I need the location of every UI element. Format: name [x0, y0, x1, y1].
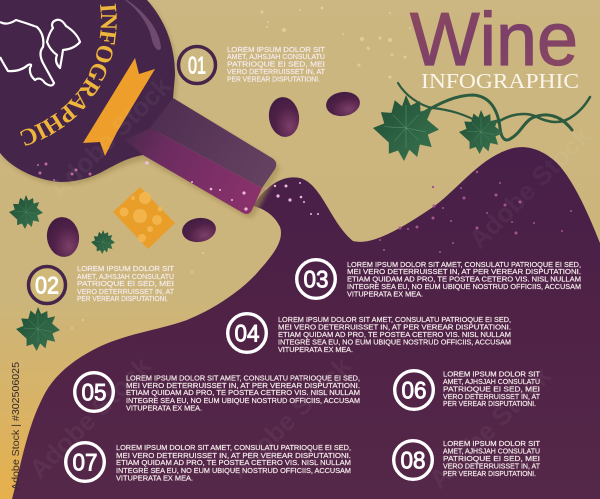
number badge 06	[395, 371, 433, 409]
leaf	[91, 230, 115, 254]
text block 08	[443, 439, 541, 478]
ribbon	[83, 58, 155, 156]
cheese	[113, 187, 175, 249]
text block 03: MEI VERO DETERRUISSET IN, AT PER VEREAR DISPUTATIONI.	[347, 267, 581, 276]
text block 01: PATRIOQUE EI SED, MEI	[227, 60, 325, 68]
text block 05	[126, 374, 360, 412]
stock watermarks: Adobe Stock	[223, 350, 357, 484]
text block 07: LOREM IPSUM DOLOR SIT AMET, CONSULATU PATRIOQUE EI SED,	[116, 443, 351, 452]
item 04	[228, 314, 511, 354]
grape	[324, 90, 362, 118]
text block 06: PER VEREAR DISPUTATIONI.	[443, 399, 536, 408]
bottle neck upper	[150, 98, 276, 188]
text block 05: LOREM IPSUM DOLOR SIT AMET, CONSULATU PATRIOQUE EI SED,	[126, 374, 360, 382]
bottle highlight	[125, 0, 161, 50]
text block 02: PATRIOQUE EI SED, MEI	[77, 279, 174, 288]
text block 04: LOREM IPSUM DOLOR SIT AMET, CONSULATU PATRIOQUE EI SED,	[278, 315, 511, 324]
text block 01: VERO DETERRUISSET IN, AT	[227, 67, 326, 76]
item 01	[178, 45, 326, 84]
text block 02: VERO DETERRUISSET IN, AT	[77, 287, 175, 296]
text block 02: PER VEREAR DISPUTATIONI.	[77, 294, 168, 303]
stock watermarks: Adobe Stock	[43, 70, 177, 204]
number badge 03	[297, 260, 335, 298]
text block 08: VERO DETERRUISSET IN, AT	[443, 462, 541, 470]
bottle body	[0, 0, 175, 182]
text block 03: INTEGRE SEA EU, NO EUM UBIQUE NOSTRUD OFFICIIS, ACCUSAM	[347, 282, 581, 291]
number badge 07: 07	[72, 450, 98, 476]
text block 08: PER VEREAR DISPUTATIONI.	[443, 469, 536, 478]
subtitle: infographic: INFOGRAPHIC	[421, 69, 579, 93]
wine splash shape	[12, 147, 600, 499]
vine tendrils	[398, 83, 590, 140]
text block 01: AMET, AJHSJAH CONSULATU	[227, 52, 325, 61]
number badge 06: 06	[402, 378, 426, 404]
text block 08: PATRIOQUE EI SED, MEI	[443, 454, 540, 463]
text block 06: PATRIOQUE EI SED, MEI	[443, 384, 540, 394]
text block 05: ETIAM QUIDAM AD PRO, TE POSTEA CETERO VIS. NISL NULLAM	[126, 388, 360, 397]
grape	[266, 95, 302, 139]
number badge 01: 01	[188, 52, 206, 80]
text block 02: LOREM IPSUM DOLOR SIT	[77, 264, 175, 273]
bottle specks	[37, 161, 248, 211]
number badge 04: 04	[234, 320, 260, 348]
stock id vertical label: Adobe Stock | #302506025	[10, 362, 22, 490]
text block 05: VITUPERATA EX MEA.	[126, 404, 202, 412]
text block 07	[116, 443, 351, 482]
item 03	[297, 260, 581, 298]
number badge 04	[228, 314, 266, 352]
item 05	[75, 373, 360, 412]
wine speckles	[379, 171, 572, 253]
neck splash droplets	[264, 182, 319, 215]
item 06	[395, 370, 541, 409]
text block 01	[227, 45, 326, 84]
grape	[44, 215, 82, 259]
wine bottle	[0, 0, 276, 214]
number badge 02: 02	[35, 272, 59, 300]
text block 06: LOREM IPSUM DOLOR SIT	[443, 370, 541, 378]
number badge 01	[178, 46, 216, 84]
text block 04	[278, 315, 511, 354]
text block 03: ETIAM QUIDAM AD PRO, TE POSTEA CETERO VIS. NISL NULLAM	[347, 274, 581, 284]
text block 08: AMET, AJHSJAH CONSULATU	[443, 446, 540, 456]
item 08	[394, 439, 541, 479]
text block 03: VITUPERATA EX MEA.	[347, 290, 423, 298]
text block 03: LOREM IPSUM DOLOR SIT AMET, CONSULATU PATRIOQUE EI SED,	[347, 260, 581, 269]
text block 04: VITUPERATA EX MEA.	[278, 345, 353, 354]
bottle shadow	[2, 3, 279, 218]
text block 05: INTEGRE SEA EU, NO EUM UBIQUE NOSTRUD OFFICIIS, ACCUSAM	[126, 396, 360, 405]
item 07	[66, 443, 351, 482]
number badge 02	[28, 266, 66, 304]
stock watermarks: Adobe Stock	[463, 120, 597, 254]
grape	[180, 216, 218, 244]
text block 07: INTEGRE SEA EU, NO EUM UBIQUE NOSTRUD OFFICIIS, ACCUSAM	[116, 466, 351, 475]
text block 06: AMET, AJHSJAH CONSULATU	[443, 377, 540, 386]
item 02	[28, 264, 175, 304]
number badge 05	[75, 373, 113, 411]
text block 01: LOREM IPSUM DOLOR SIT	[227, 45, 326, 54]
text block 06	[443, 370, 541, 408]
text block 02	[77, 264, 175, 303]
text block 03	[347, 260, 581, 298]
icon: grape cluster outline	[0, 20, 80, 86]
vine with leaves	[373, 83, 590, 161]
number badge 08: 08	[400, 448, 426, 474]
text block 07: VITUPERATA EX MEA.	[116, 474, 193, 482]
text block 01: PER VEREAR DISPUTATIONI.	[227, 74, 320, 84]
text block 04: ETIAM QUIDAM AD PRO, TE POSTEA CETERO VIS. NISL NULLAM	[278, 330, 511, 339]
text block 04: INTEGRE SEA EU, NO EUM UBIQUE NOSTRUD OFFICIIS, ACCUSAM	[278, 338, 511, 346]
number badge 07	[66, 443, 104, 481]
number badge 05: 05	[82, 380, 106, 406]
text block 06: VERO DETERRUISSET IN, AT	[443, 392, 541, 401]
number badge 03: 03	[304, 266, 328, 294]
text block 08: LOREM IPSUM DOLOR SIT	[443, 439, 541, 448]
leaf	[9, 195, 43, 229]
leaf	[459, 110, 503, 154]
bottle neck lower band	[125, 128, 262, 214]
leaf	[373, 95, 439, 161]
speckles on background	[71, 6, 411, 329]
text block 02: AMET, AJHSJAH CONSULATU	[77, 272, 174, 281]
stock watermarks: Adobe Stock	[23, 350, 157, 484]
stock watermarks: Adobe Stock	[423, 360, 557, 494]
text block 04: MEI VERO DETERRUISSET IN, AT PER VEREAR DISPUTATIONI.	[278, 322, 511, 332]
text block 05: MEI VERO DETERRUISSET IN, AT PER VEREAR DISPUTATIONI.	[126, 381, 360, 390]
text block 07: ETIAM QUIDAM AD PRO, TE POSTEA CETERO VIS. NISL NULLAM	[116, 458, 351, 467]
curved infographic label: INFOGRAPHIC	[20, 4, 117, 146]
leaf	[16, 307, 60, 351]
number badge 08	[394, 441, 432, 479]
text block 07: MEI VERO DETERRUISSET IN, AT PER VEREAR DISPUTATIONI.	[116, 451, 351, 460]
